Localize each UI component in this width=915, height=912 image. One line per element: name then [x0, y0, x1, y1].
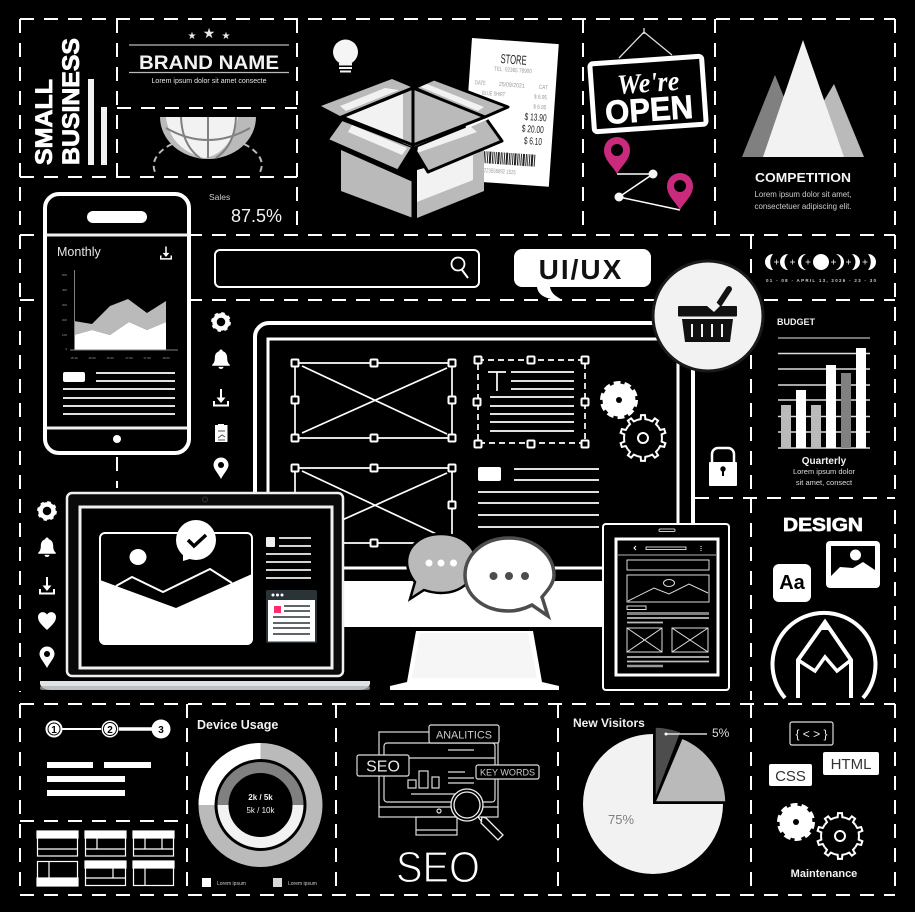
barcode — [479, 157, 536, 161]
base — [40, 681, 370, 690]
area chart: 17:30 — [143, 356, 151, 360]
paper — [462, 38, 559, 187]
grid — [778, 337, 870, 339]
we're text: We're — [616, 66, 680, 101]
phone text block — [63, 372, 85, 382]
bezel — [255, 323, 693, 600]
handle — [714, 289, 729, 312]
receipt text: 25/09/2021 — [499, 82, 526, 90]
route nodes — [648, 170, 658, 178]
globe icon — [154, 117, 262, 172]
screen — [268, 339, 678, 568]
budget chart panel: sit amet, consect — [796, 478, 853, 487]
new visitors panel — [573, 716, 730, 874]
connectors — [62, 728, 101, 730]
area chart: 18:00 — [162, 356, 170, 360]
competition panel — [742, 40, 864, 211]
image icon — [826, 541, 880, 588]
chin — [255, 581, 695, 627]
white bubble — [465, 538, 554, 616]
layout 2 — [85, 831, 126, 856]
receipt totals — [521, 112, 547, 148]
keywords tag: KEY WORDS — [480, 768, 535, 778]
stars: ★ — [222, 31, 231, 42]
caption: Lorem ipsum dolor — [793, 467, 856, 476]
inner left — [342, 88, 413, 147]
open text: OPEN — [604, 88, 694, 131]
icon column 2 — [38, 502, 56, 668]
bell — [38, 538, 56, 557]
download — [214, 389, 228, 406]
receipt text: $ 6.95 — [534, 94, 548, 101]
pink pin 1 — [604, 137, 630, 174]
stars: ★ — [203, 25, 215, 41]
box edges — [327, 79, 508, 218]
stand — [390, 631, 559, 690]
body — [603, 524, 729, 690]
label: Sales — [209, 192, 230, 202]
area chart: 0 — [65, 347, 67, 351]
wireframe box 2 — [292, 464, 456, 546]
bars — [781, 405, 791, 448]
text bars — [47, 762, 151, 796]
stars — [188, 25, 231, 42]
smartphone — [45, 194, 189, 453]
heading: Device Usage — [197, 718, 278, 732]
gears — [602, 384, 667, 461]
label: Maintenance — [791, 868, 857, 880]
receipt text: BLUE SHIRT — [482, 91, 505, 98]
seo illustration — [357, 725, 539, 892]
area chart: 500 — [62, 273, 67, 277]
receipt totals: $ 13.90 — [524, 112, 547, 124]
center labels: 2k / 5k — [248, 793, 273, 802]
receipt — [462, 38, 559, 187]
hemisphere — [160, 117, 256, 159]
we're open sign — [590, 28, 706, 132]
typeface icon — [773, 564, 811, 602]
receipt text — [473, 65, 549, 111]
gear — [38, 502, 56, 520]
header bar — [618, 554, 716, 556]
check bubble — [176, 520, 216, 561]
tagline: Lorem ipsum dolor sit amet consecte — [152, 78, 267, 85]
inner right — [413, 88, 485, 147]
brand name logo — [129, 25, 289, 85]
monthly label: Monthly — [57, 245, 102, 259]
css tag — [769, 764, 812, 786]
layout 5 — [85, 861, 126, 886]
screen — [80, 507, 332, 668]
wireframe contents — [627, 560, 709, 652]
hanging string — [619, 28, 672, 58]
image card — [100, 533, 252, 644]
layout 6 — [133, 861, 174, 886]
shopping basket badge — [653, 261, 763, 371]
receipt totals: $ 20.00 — [521, 124, 544, 136]
heading: COMPETITION — [755, 170, 851, 185]
ui/ux speech label — [514, 249, 651, 300]
open cardboard box — [321, 79, 508, 218]
pencil in circle — [772, 613, 876, 698]
html tag: HTML — [831, 756, 871, 773]
store heading: STORE — [500, 51, 527, 68]
text block — [266, 537, 275, 547]
legend — [202, 878, 211, 887]
5% label: 5% — [712, 726, 730, 740]
back left flap — [321, 79, 411, 116]
area chart: 16:30 — [106, 356, 114, 360]
laptop — [40, 493, 370, 690]
sign board — [590, 56, 706, 132]
pin — [40, 646, 54, 668]
design panel — [772, 515, 880, 698]
right panel — [417, 150, 484, 218]
area chart: 100 — [62, 333, 67, 337]
orbit arcs — [154, 144, 262, 172]
css tag: CSS — [775, 768, 806, 785]
left panel — [341, 150, 413, 218]
home button — [113, 435, 121, 443]
maintenance panel — [769, 722, 879, 880]
front left flap — [327, 121, 412, 170]
route — [617, 174, 680, 210]
front right flap — [415, 120, 502, 172]
value: 87.5% — [231, 206, 282, 226]
business text: BUSINESS — [58, 38, 85, 165]
layout 3 — [133, 831, 174, 856]
gear — [212, 313, 230, 331]
small text: SMALL — [31, 79, 58, 165]
desktop monitor — [255, 323, 695, 690]
device usage panel: Lorem ipsum — [217, 881, 246, 887]
body — [45, 194, 189, 453]
outer ring — [206, 751, 314, 859]
layout 4 — [37, 862, 78, 886]
bell — [212, 350, 230, 369]
analytics tag: ANALITICS — [436, 730, 492, 742]
seo heading: SEO — [396, 843, 480, 892]
device usage panel — [197, 718, 317, 887]
bars — [88, 79, 107, 165]
area chart: 400 — [62, 288, 67, 292]
monitor text block — [478, 467, 599, 527]
inner ring — [223, 768, 298, 805]
typeface icon: Aa — [779, 572, 806, 594]
clipboard — [215, 424, 228, 442]
receipt totals: $ 6.10 — [524, 136, 543, 148]
area chart: 200 — [62, 318, 67, 322]
pink pin 2 — [667, 173, 693, 210]
seo tag: SEO — [366, 758, 400, 776]
layout thumbnails — [37, 831, 174, 886]
competition panel: consectetuer adipiscing elit. — [754, 202, 852, 211]
screen — [616, 539, 718, 675]
quarterly label: Quarterly — [802, 456, 847, 467]
monitor line art — [379, 732, 498, 835]
map route with pins — [604, 137, 693, 210]
speaker — [659, 529, 675, 532]
tablet — [603, 524, 729, 690]
bubble tail — [537, 287, 563, 300]
sales stat — [209, 192, 282, 226]
area chart: 16:00 — [88, 356, 96, 360]
date caption: 01 - 08 - APRIL 13, 2026 - 23 - 30 — [766, 278, 876, 283]
receipt text: DATE — [475, 80, 486, 87]
receipt text: TEL. 02365 78900 — [494, 67, 532, 75]
gears — [780, 806, 864, 859]
html tag — [823, 752, 879, 775]
75% label: 75% — [608, 812, 634, 827]
text selection box — [474, 356, 588, 448]
stars: ★ — [188, 31, 197, 42]
magnifier icon — [452, 258, 464, 270]
receipt text: $ 6.95 — [533, 104, 547, 111]
area chart: 300 — [62, 303, 67, 307]
pin — [214, 458, 228, 479]
budget chart panel — [777, 317, 870, 487]
grey bubble — [407, 534, 476, 599]
area chart: 15:30 — [70, 356, 78, 360]
heading: New Visitors — [573, 716, 645, 730]
padlock icon — [709, 448, 737, 486]
receipt text: CAT — [538, 85, 548, 91]
barcode number: 5 0223556892 1525 — [478, 168, 516, 176]
code tag — [790, 722, 833, 745]
search bar — [215, 250, 479, 287]
body text: Lorem ipsum dolor sit amet, — [754, 190, 852, 199]
callout — [664, 732, 668, 736]
icon column 1 — [212, 313, 230, 479]
moons — [765, 254, 876, 270]
code tag: { < > } — [795, 727, 828, 741]
heart — [38, 612, 56, 630]
field — [215, 250, 479, 287]
speaker pill — [87, 211, 147, 223]
rule lines — [129, 45, 289, 72]
magnifier — [451, 789, 503, 840]
device usage panel: Lorem ipsum — [288, 881, 317, 887]
area chart — [62, 270, 178, 360]
mountains — [742, 75, 808, 157]
camera — [202, 497, 208, 502]
stepper panel — [46, 720, 170, 796]
basket — [678, 306, 737, 316]
seo tag — [357, 755, 409, 776]
lid — [67, 493, 343, 676]
brand name: BRAND NAME — [139, 52, 279, 74]
screen dividers — [46, 235, 188, 428]
analytics tag — [429, 725, 499, 743]
step 1: 1 — [51, 725, 57, 736]
device usage panel: 5k / 10k — [246, 806, 276, 815]
bubble — [514, 249, 651, 287]
keywords tag — [476, 765, 539, 779]
main slice — [583, 734, 723, 874]
chat bubbles — [407, 534, 554, 616]
moon phases — [765, 254, 876, 283]
dark slice — [655, 727, 681, 800]
light bulb icon — [333, 40, 358, 72]
small business title — [31, 38, 107, 165]
step 3: 3 — [158, 725, 164, 736]
heading: BUDGET — [777, 317, 816, 327]
download icon — [161, 246, 171, 259]
label: UI/UX — [539, 254, 623, 285]
area chart: 17:00 — [125, 356, 133, 360]
heading: DESIGN — [783, 515, 863, 535]
layout 1 — [37, 831, 78, 856]
back right flap — [416, 79, 508, 117]
wireframe box 1 — [292, 360, 456, 442]
mini window — [266, 590, 317, 643]
circle — [653, 261, 763, 371]
step 2: 2 — [107, 725, 113, 736]
download — [40, 577, 54, 594]
silver slice — [655, 738, 726, 802]
